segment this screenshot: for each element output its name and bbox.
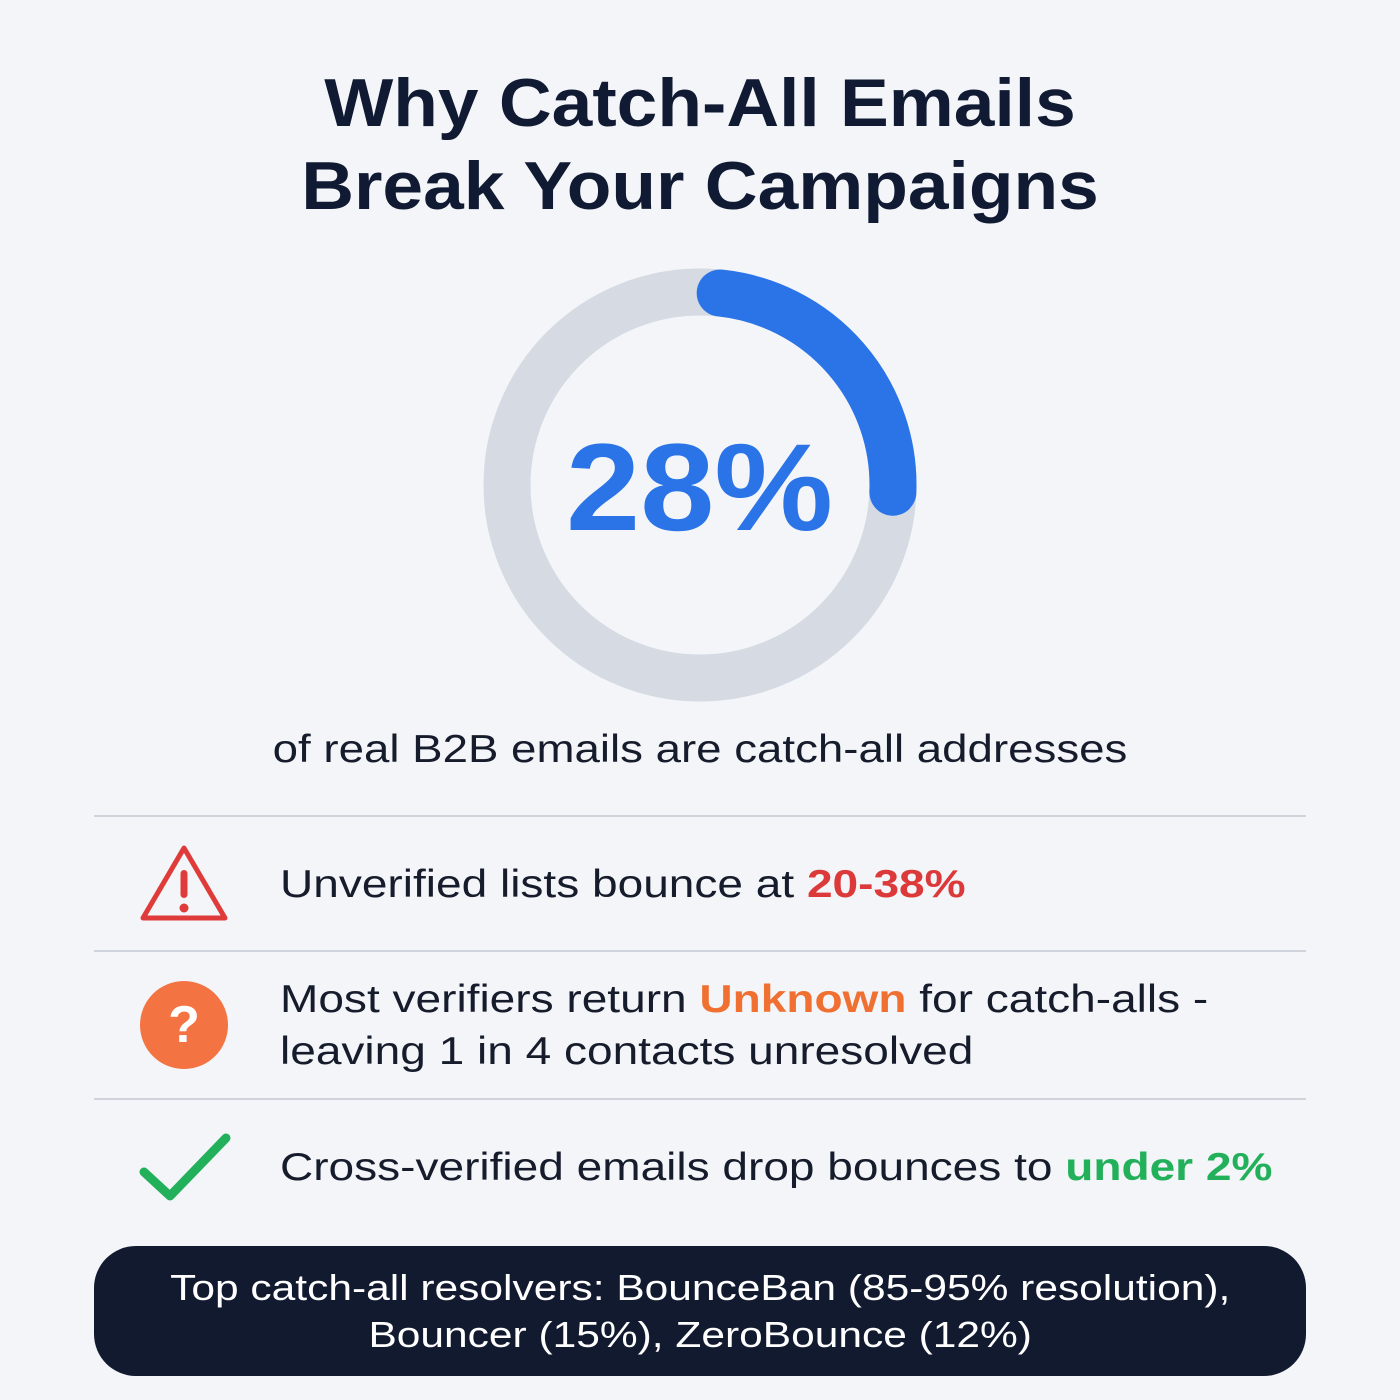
donut chart: 28% bbox=[566, 419, 833, 557]
row 3 text: Cross-verified emails drop bounces to under 2% bbox=[280, 1146, 1272, 1189]
row 2 text: leaving 1 in 4 contacts unresolved bbox=[280, 1030, 973, 1073]
icon: question: ? bbox=[168, 996, 200, 1054]
row 2 text bbox=[280, 978, 1208, 1073]
title: Break Your Campaigns bbox=[301, 148, 1099, 224]
icon: check bbox=[140, 1134, 230, 1200]
row 1 text: Unverified lists bounce at 20-38% bbox=[280, 863, 966, 906]
title: Why Catch-All Emails bbox=[324, 65, 1076, 141]
icon: question bbox=[140, 981, 228, 1069]
title bbox=[301, 65, 1099, 224]
callout box: Top catch-all resolvers: BounceBan (85-95% resolution), bbox=[170, 1267, 1230, 1308]
icon: warning bbox=[140, 846, 228, 920]
row 2 text: Most verifiers return Unknown for catch-alls - bbox=[280, 978, 1208, 1021]
donut chart bbox=[484, 268, 916, 702]
callout box: Bouncer (15%), ZeroBounce (12%) bbox=[368, 1314, 1032, 1355]
callout box bbox=[94, 1246, 1306, 1376]
subtitle: of real B2B emails are catch-all addresses bbox=[273, 728, 1127, 771]
